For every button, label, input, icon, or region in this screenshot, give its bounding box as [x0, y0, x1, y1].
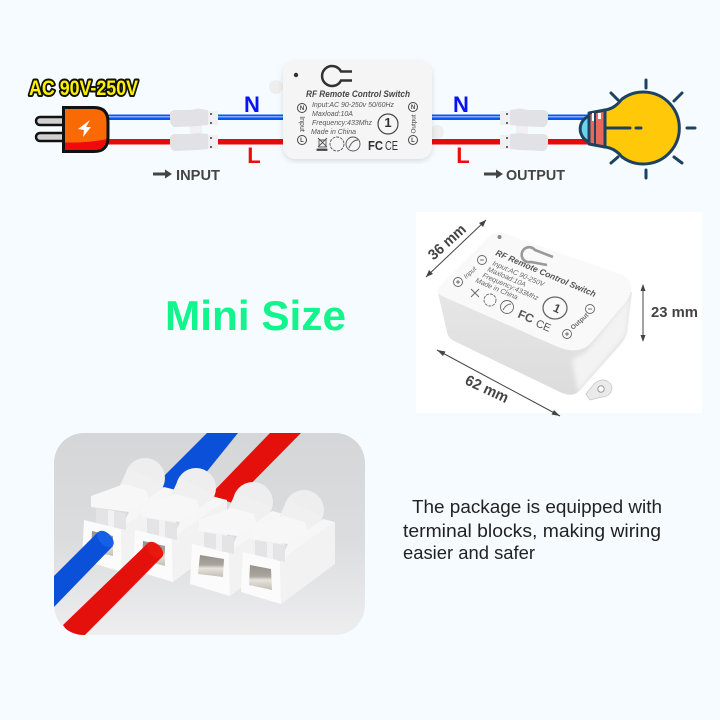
block 2: [133, 468, 227, 582]
icon: light bulb: [580, 80, 695, 178]
description text: easier and safer: [403, 543, 535, 563]
module body: [438, 240, 632, 395]
description text: The package is equipped with: [412, 497, 662, 517]
module 3D view: FC: [516, 307, 536, 326]
panel: dimensions: [416, 212, 702, 416]
wire labels: N: [244, 92, 260, 117]
wire labels: N: [453, 92, 469, 117]
icon: plug: [36, 108, 108, 152]
logo: [522, 247, 553, 265]
switch module: Output: [410, 114, 418, 134]
description text: terminal blocks, making wiring: [403, 521, 661, 541]
certification icons: CE: [385, 138, 398, 153]
dimension: 36 mm: [425, 220, 486, 277]
module specs: [311, 100, 394, 136]
certification icons: FC: [368, 138, 384, 153]
module specs: Input:AC 90-250v 50/60Hz: [312, 100, 394, 109]
printed specs: Output: [570, 311, 591, 331]
dimension: 62 mm: 62 mm: [462, 372, 511, 407]
input terminal connector: [170, 108, 218, 151]
heading: mini size: Mini Size: [165, 292, 346, 339]
switch module: L: [411, 138, 415, 144]
module specs: Maxload:10A: [312, 109, 353, 118]
switch module: N: [300, 106, 304, 112]
input label: INPUT: [176, 167, 220, 184]
icon: module logo: [322, 66, 352, 86]
photo: terminal blocks with wires: [54, 433, 365, 635]
voltage label: AC 90V-250V: [29, 77, 138, 100]
lower blue wire: [54, 528, 117, 607]
module 3D view: 1: [551, 301, 563, 316]
printed specs: Maxload:10A: [486, 266, 527, 289]
certification icons: [317, 137, 398, 153]
printed specs: Input:AC 90-250V: [491, 260, 546, 289]
output label: OUTPUT: [506, 167, 565, 184]
printed specs: Input: [463, 265, 479, 280]
block 3: [190, 482, 284, 596]
module 3D view: [437, 232, 632, 400]
block 4: [241, 490, 335, 604]
output terminal connector: [500, 108, 548, 151]
channel badge: [378, 114, 398, 134]
switch module: N: [411, 105, 415, 111]
block 1: [82, 458, 176, 572]
channel badge: 1: [384, 115, 392, 130]
wire labels: [244, 92, 470, 168]
infographic: [28, 61, 702, 635]
wires: [108, 114, 591, 144]
upper blue wire: [163, 433, 238, 495]
module top face: [437, 232, 631, 350]
dimension: 23 mm: [640, 284, 698, 342]
mounting ear: [586, 380, 612, 400]
printed specs: Frequency:433Mhz: [481, 272, 540, 302]
dimension: 36 mm: 36 mm: [425, 221, 470, 264]
module specs: Frequency:433Mhz: [312, 118, 372, 127]
switch module: L: [300, 138, 304, 144]
module title: RF Remote Control Switch: [306, 89, 410, 100]
printed specs: Made in China: [474, 277, 519, 302]
input label: [153, 167, 220, 184]
dimension: 23 mm: 23 mm: [651, 304, 698, 321]
printed specs: [463, 260, 591, 331]
upper red wire: [210, 433, 301, 503]
wire labels: L: [456, 143, 470, 168]
dimension: 62 mm: [437, 350, 560, 416]
terminal marks: [298, 102, 418, 144]
printed title: RF Remote Control Switch: [494, 248, 598, 299]
switch module: [269, 61, 444, 159]
description text: [403, 497, 662, 563]
module specs: Made in China: [311, 127, 356, 136]
lower red wire: [63, 539, 166, 635]
wire labels: L: [247, 143, 261, 168]
module 3D view: CE: [534, 318, 553, 335]
printed icons: [454, 256, 594, 338]
switch module: Input: [298, 116, 305, 132]
wiring diagram: [29, 61, 695, 184]
